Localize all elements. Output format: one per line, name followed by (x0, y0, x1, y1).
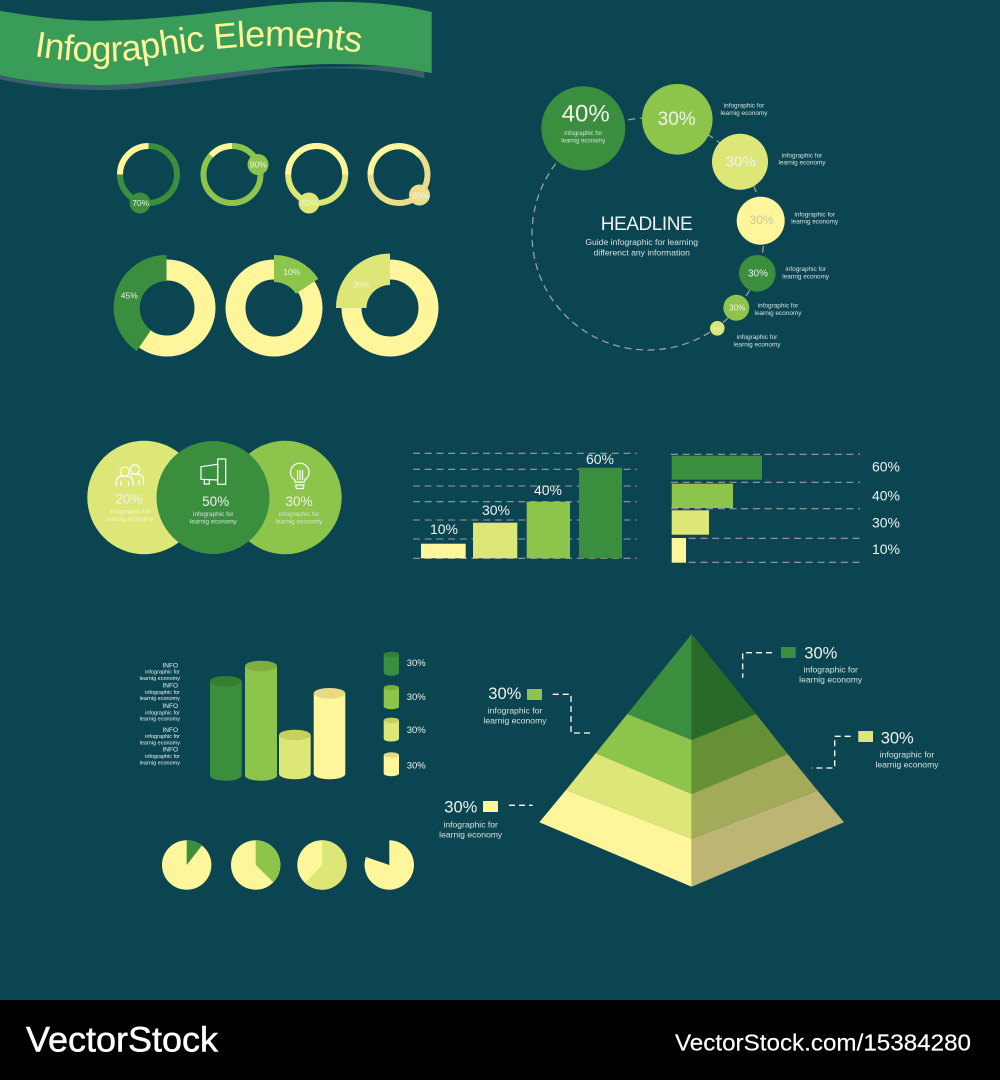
hbar 10%: 10% (872, 541, 900, 557)
pyramid label right: infographic for (880, 750, 934, 760)
horizontal bar chart (671, 454, 900, 563)
bar 60%: 60% (586, 451, 614, 467)
bubble 30% c (737, 197, 839, 245)
bar 40% (527, 482, 570, 558)
watermark url: VectorStock.com/15384280 (675, 1030, 971, 1056)
pyramid label bottom left: infographic for (443, 819, 498, 829)
icon: megaphone (201, 459, 226, 484)
icon: light bulb (290, 463, 309, 488)
venn text 20% (107, 492, 154, 523)
ring 60% (370, 146, 430, 206)
title text: Infographic Elements (37, 20, 361, 69)
pyramid label bottom left: 30% (444, 799, 478, 817)
donut 30%: 30% (353, 279, 370, 289)
pyramid label top right: 30% (804, 644, 838, 662)
bar 40%: 40% (534, 482, 562, 498)
hbar 30%: 30% (872, 514, 900, 530)
cylinder chart (210, 661, 345, 781)
headline (585, 214, 698, 257)
info labels: INFO (162, 703, 178, 710)
bar 30%: 30% (482, 502, 510, 518)
donut 30% (336, 254, 428, 346)
bubble 30% d: 30% (748, 269, 768, 280)
venn text 20%: 20% (115, 492, 143, 507)
venn text 50%: learnig economy (190, 518, 238, 525)
bubble 40%: learnig economy (561, 138, 605, 144)
bubble 30% e (723, 295, 802, 321)
pyramid label right (812, 729, 939, 770)
pyramid layer 2 (596, 714, 788, 794)
ring 70% (120, 146, 177, 214)
donut 45%: 45% (121, 290, 138, 300)
info labels: learnig economy (140, 760, 180, 766)
pie 3 (297, 840, 347, 890)
bubble 30% e: learnig economy (755, 310, 802, 317)
bubble 30% d: learnig economy (782, 273, 830, 280)
pyramid label bottom left (439, 799, 533, 839)
cylinder legend (384, 652, 426, 776)
info labels: learnig economy (140, 676, 180, 682)
bubble small: 30% (713, 326, 722, 331)
bubble 30% e: 30% (729, 304, 745, 313)
venn text 30%: 30% (285, 494, 313, 509)
venn text 30%: learnig economy (276, 518, 323, 525)
venn text 20%: learnig economy (107, 516, 154, 523)
donut 10% (236, 255, 318, 346)
pyramid label top right (743, 644, 863, 685)
bar 10%: 10% (430, 521, 458, 537)
dashed circle (532, 118, 764, 350)
donut 45% (114, 255, 205, 351)
info labels: INFO (162, 682, 178, 689)
icon: people (116, 465, 144, 486)
pyramid label right: 30% (881, 729, 914, 747)
bubble 30% b: learnig economy (779, 160, 826, 167)
venn text 50%: 50% (202, 494, 229, 509)
bubble 40%: 40% (562, 101, 610, 128)
pyramid label top right: infographic for (803, 665, 858, 675)
bubble 30% d: infographic for (785, 266, 827, 273)
bubble 30% a: infographic for (724, 102, 765, 109)
info labels: infographic for (145, 690, 180, 696)
pyramid label right: learnig economy (875, 760, 939, 770)
pie 2 (231, 840, 280, 890)
donut 10%: 10% (283, 267, 301, 277)
hbar 40%: 40% (872, 488, 900, 504)
venn text 20%: infographic for (110, 508, 151, 515)
pyramid label top right: learnig economy (799, 675, 863, 685)
bubble small: learnig economy (734, 341, 781, 348)
venn text 50%: infographic for (193, 511, 234, 518)
pyramid label left: infographic for (488, 705, 542, 715)
bubble 40%: infographic for (564, 131, 602, 137)
bubble timeline (532, 84, 839, 350)
pyramid label bottom left: learnig economy (439, 829, 503, 839)
legend 1: 30% (407, 658, 426, 669)
pyramid layer 1 (627, 634, 756, 740)
info labels: learnig economy (140, 740, 180, 746)
bubble 30% e: infographic for (758, 303, 799, 310)
hbar 60% (672, 456, 900, 480)
hbar 60%: 60% (872, 458, 900, 474)
legend 2: 30% (407, 692, 426, 703)
legend 3: 30% (407, 725, 426, 736)
info labels: infographic for (145, 670, 180, 676)
vertical bar chart (413, 451, 637, 558)
bubble 40% (541, 86, 625, 170)
info labels: INFO (162, 747, 178, 754)
hbar 10% (672, 538, 900, 563)
small progress rings (120, 146, 430, 214)
info labels: infographic for (145, 754, 180, 760)
pyramid label left (483, 685, 591, 733)
ring 70%: 70% (132, 198, 150, 208)
bubble 30% d (739, 255, 830, 292)
venn text 30%: infographic for (279, 511, 320, 518)
ring 60%: 60% (412, 190, 430, 200)
pyramid label left: 30% (488, 685, 522, 703)
headline: HEADLINE (601, 214, 693, 235)
bubble 30% c: learnig economy (791, 219, 839, 226)
bubble 30% c: infographic for (794, 211, 836, 218)
footer bar (0, 1000, 1000, 1080)
bar 10% (421, 521, 466, 558)
bubble 30% b: 30% (726, 154, 756, 171)
info labels: infographic for (145, 710, 180, 716)
bubble small (710, 321, 781, 348)
bubble 30% a: learnig economy (721, 110, 768, 117)
bubble 30% c: 30% (750, 213, 774, 227)
pyramid layer 4 (539, 790, 844, 887)
pyramid (539, 634, 844, 887)
info labels: INFO (162, 727, 178, 734)
ring 90% (204, 146, 268, 203)
pyramid label left: learnig economy (483, 715, 547, 725)
cylinder 2 (245, 661, 277, 781)
info labels: learnig economy (140, 696, 180, 702)
bubble 30% b: infographic for (782, 152, 823, 159)
bubble 30% a (642, 84, 768, 155)
info labels: learnig economy (140, 717, 180, 723)
pie 1 (162, 840, 211, 890)
info labels: INFO (162, 663, 178, 670)
info labels (140, 663, 180, 766)
pie 4 (365, 840, 414, 890)
venn circles (87, 441, 342, 554)
legend 4: 30% (407, 760, 426, 771)
bubble 30% a: 30% (658, 109, 696, 130)
venn text 50% (190, 494, 238, 525)
bar 30% (473, 502, 517, 558)
bubble 30% b (712, 134, 826, 190)
cylinder 4 (314, 688, 345, 779)
ring 50%: 50% (301, 198, 319, 208)
bar 60% (579, 451, 622, 558)
bubble small: infographic for (737, 334, 778, 341)
headline: Guide infographic for learning (585, 237, 698, 247)
venn text 30% (276, 494, 323, 525)
pyramid layer 3 (566, 753, 818, 839)
cylinder 1 (210, 676, 242, 781)
watermark brand: VectorStock (26, 1021, 219, 1060)
hbar 40% (672, 484, 900, 508)
ring 90%: 90% (250, 160, 267, 170)
cylinder 3 (279, 730, 311, 779)
info labels: infographic for (145, 734, 180, 740)
ring 50% (288, 146, 345, 214)
title banner (0, 2, 432, 90)
hbar 30% (672, 510, 900, 535)
headline: differenct any information (594, 247, 690, 257)
